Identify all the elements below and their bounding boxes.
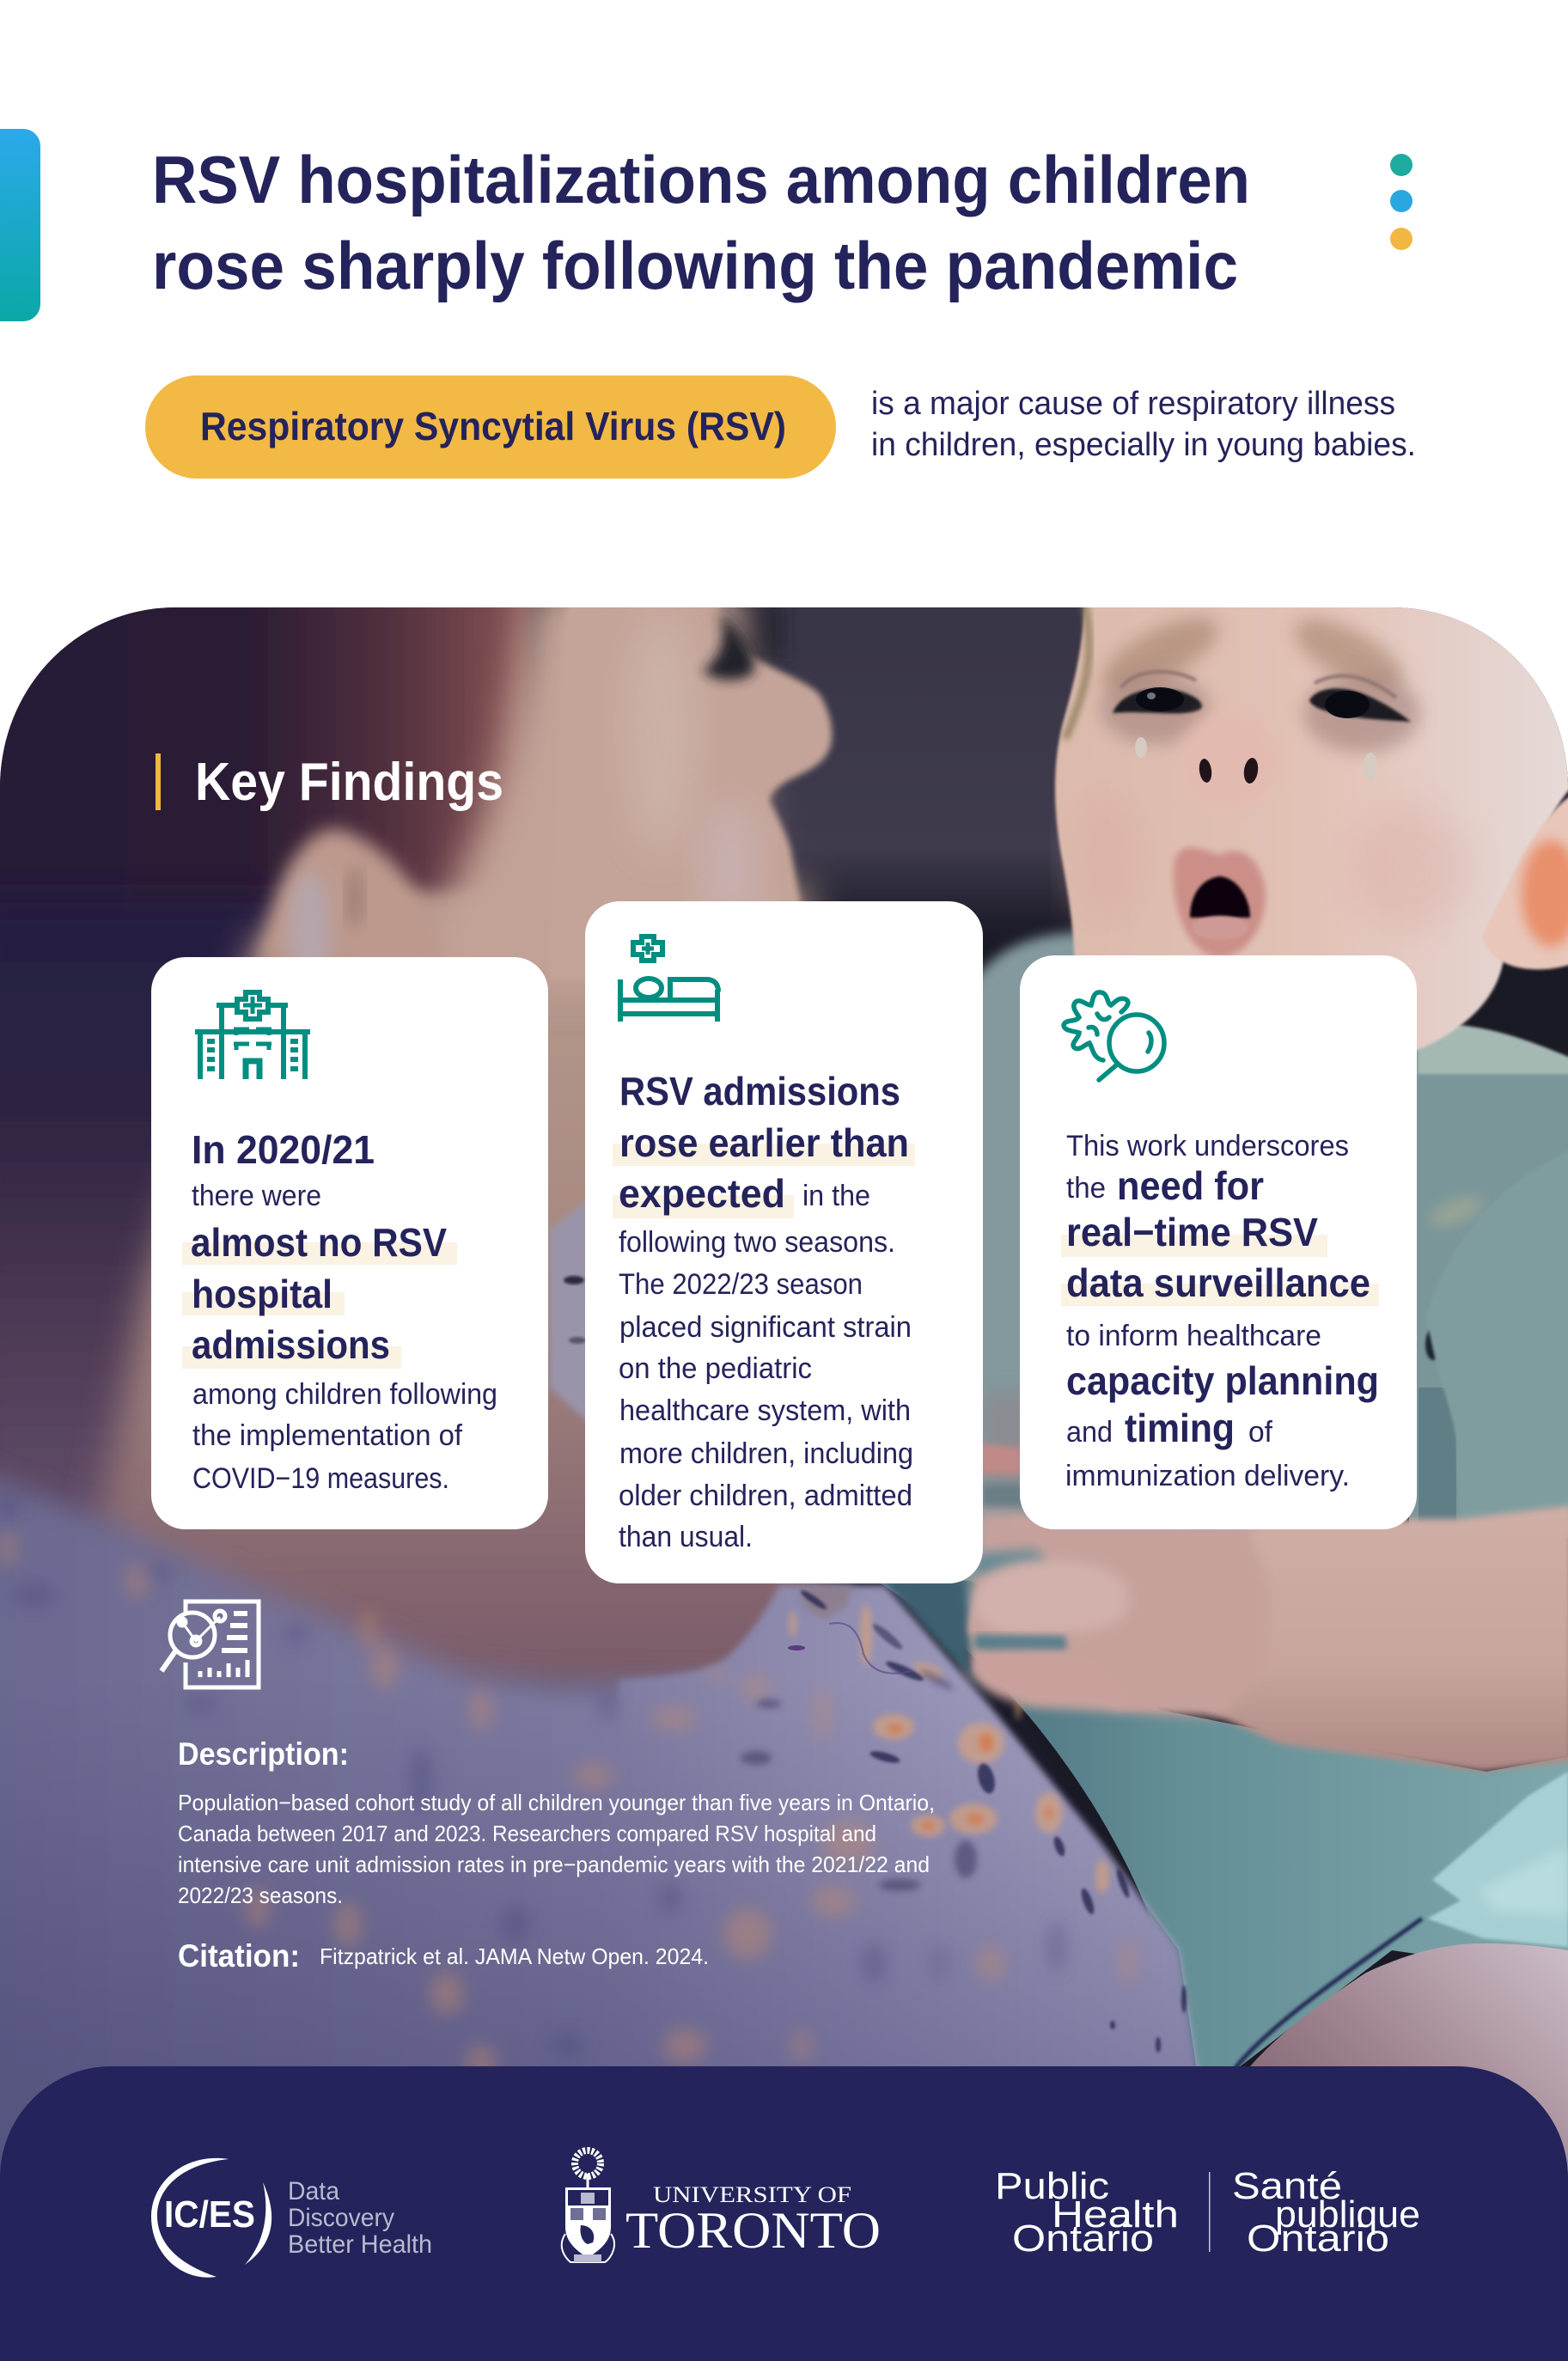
card 2 text: following two seasons. (619, 1226, 895, 1259)
card 3 text: of (1248, 1416, 1273, 1449)
card 2 text: expected (619, 1171, 785, 1216)
mother's shirt, sharp right side (619, 1585, 1197, 2251)
citation: Fitzpatrick et al. JAMA Netw Open. 2024. (320, 1943, 709, 1969)
card 1 text: there were (192, 1180, 321, 1212)
highlights (1061, 1235, 1379, 1306)
description: 2022/23 seasons. (178, 1882, 343, 1908)
mother's ear (258, 829, 447, 971)
RSV pill (145, 375, 836, 479)
logo: Public Health Ontario / Santé publique Ontario: Health (1052, 2193, 1179, 2236)
shirt shadow (0, 1675, 1197, 2251)
baby mouth (1174, 847, 1266, 958)
mother's face, profile (565, 607, 837, 901)
baby arm (962, 1505, 1568, 1772)
right background behind jaw (1461, 945, 1568, 1061)
logo: Public Health Ontario / Santé publique Ontario (995, 2165, 1420, 2260)
card 2 text: rose earlier than (619, 1120, 909, 1165)
description: intensive care unit admission rates in pre−pandemic years with the 2021/22 and (178, 1852, 930, 1877)
crest (562, 2151, 614, 2262)
panel: card 2 (585, 901, 983, 1583)
card 2 text (619, 1069, 913, 1553)
card 2 text: RSV admissions (619, 1069, 900, 1113)
RSV pill: Respiratory Syncytial Virus (RSV) (200, 404, 786, 448)
intro text (871, 386, 1416, 463)
logo: Public Health Ontario / Santé publique Ontario: Santé (1232, 2165, 1342, 2207)
title: RSV hospitalizations among children (152, 142, 1250, 217)
baby shirt, shoulder (962, 924, 1076, 1586)
logo: Public Health Ontario / Santé publique Ontario: Public (995, 2165, 1109, 2207)
shirt fold (1427, 1772, 1568, 1947)
mother's shirt, soft left side (0, 1461, 739, 2268)
card 3 text (1065, 1130, 1379, 1492)
card 3 text: data surveillance (1066, 1260, 1370, 1305)
title: rose sharply following the pandemic (152, 228, 1238, 303)
description (178, 1736, 935, 1908)
intro text: is a major cause of respiratory illness (871, 386, 1395, 422)
logo: IC/ES: Data (288, 2177, 339, 2205)
mother's face, soft side (404, 584, 773, 988)
icon: virus under magnifier (1064, 992, 1164, 1080)
card 3 text: immunization delivery. (1065, 1460, 1350, 1492)
card 2 text: The 2022/23 season (619, 1268, 863, 1301)
baby eyes (1113, 689, 1202, 713)
logo: Public Health Ontario / Santé publique Ontario: Ontario (1012, 2218, 1154, 2260)
baby tears (1135, 737, 1147, 758)
citation (178, 1938, 709, 1974)
mother's neck (95, 885, 825, 1701)
icon: report with magnifier (162, 1601, 259, 1687)
icon: hospital bed (620, 936, 718, 1022)
card 2 text: placed significant strain (619, 1311, 912, 1344)
card 3 text: and (1066, 1416, 1113, 1449)
card 1 text: hospital (192, 1272, 333, 1316)
highlights (613, 1144, 915, 1218)
description: Description: (178, 1736, 349, 1772)
logo: University of Toronto: TORONTO (625, 2202, 881, 2259)
card 3 text: to inform healthcare (1066, 1320, 1321, 1352)
logo: Public Health Ontario / Santé publique Ontario: Ontario (1247, 2218, 1389, 2260)
baby fingers (979, 1443, 1022, 1474)
card 3 text: timing (1125, 1406, 1235, 1450)
description: Canada between 2017 and 2023. Researchers compared RSV hospital and (178, 1821, 876, 1846)
logo: IC/ES: Discovery (288, 2204, 394, 2232)
sharper shirt flowers (790, 1604, 1109, 1894)
citation: Citation: (178, 1938, 300, 1974)
decorative dots (1390, 154, 1412, 250)
baby eye sockets (1101, 673, 1211, 745)
mother's hair (0, 607, 540, 907)
card 2 text: than usual. (619, 1521, 753, 1553)
card 2 text: healthcare system, with (619, 1394, 911, 1427)
dark edge behind hand (885, 1581, 997, 1710)
baby shirt, right (1409, 1044, 1568, 1538)
title (152, 142, 1250, 303)
logo: IC/ES: Better Health (288, 2230, 432, 2259)
footer band (0, 2066, 1568, 2361)
panel: card 1 (151, 957, 548, 1529)
card 2 text: more children, including (619, 1437, 913, 1470)
logo: Public Health Ontario / Santé publique Ontario: publique (1275, 2193, 1420, 2236)
card 3 text: capacity planning (1066, 1358, 1379, 1403)
baby lower shirt (876, 1581, 1568, 2071)
description: Population−based cohort study of all children younger than five years in Ontario, (178, 1790, 935, 1815)
blurred shirt flowers (0, 1529, 1136, 2079)
logo: University of Toronto: UNIVERSITY OF (653, 2182, 851, 2207)
purple collar line (829, 1623, 911, 1674)
baby hand (967, 1512, 1272, 1717)
baby ear (1482, 795, 1568, 969)
card 2 text: older children, admitted (619, 1479, 912, 1512)
key findings heading: Key Findings (195, 753, 503, 812)
card 1 text: In 2020/21 (192, 1127, 375, 1172)
card 3 text: This work underscores (1066, 1130, 1349, 1162)
intro text: in children, especially in young babies. (871, 427, 1416, 463)
photo: mother holding crying baby (0, 584, 1568, 2268)
mother's collar (550, 1199, 593, 1426)
accent tab (0, 129, 40, 321)
card 1 text (191, 1127, 497, 1495)
baby face (1055, 597, 1568, 1050)
baby leg (1240, 1943, 1568, 2251)
photo background (0, 607, 1568, 2066)
icon: hospital (195, 992, 310, 1079)
highlights (182, 1242, 457, 1369)
card 1 text: COVID−19 measures. (192, 1462, 449, 1495)
panel: card 3 (1020, 955, 1417, 1529)
card 1 text: admissions (192, 1322, 390, 1367)
baby sleeve (1426, 1150, 1568, 1522)
card 3 text: real−time RSV (1066, 1210, 1318, 1254)
card 3 text: the (1066, 1172, 1106, 1205)
baby brows (1092, 603, 1228, 706)
mother's eyelash (703, 610, 754, 680)
logo: University of Toronto (562, 2151, 881, 2262)
card 1 text: the implementation of (192, 1419, 463, 1452)
card 2 text: on the pediatric (619, 1352, 812, 1385)
card 1 text: almost no RSV (191, 1220, 447, 1265)
card 3 text: need for (1117, 1163, 1264, 1208)
logo: IC/ES: IC/ES (164, 2193, 255, 2236)
baby nose (1181, 711, 1277, 810)
card 2 text: in the (802, 1180, 870, 1212)
card 1 text: among children following (192, 1378, 497, 1411)
baby eyelid folds (1121, 672, 1196, 687)
logo: IC/ES (151, 2158, 432, 2278)
